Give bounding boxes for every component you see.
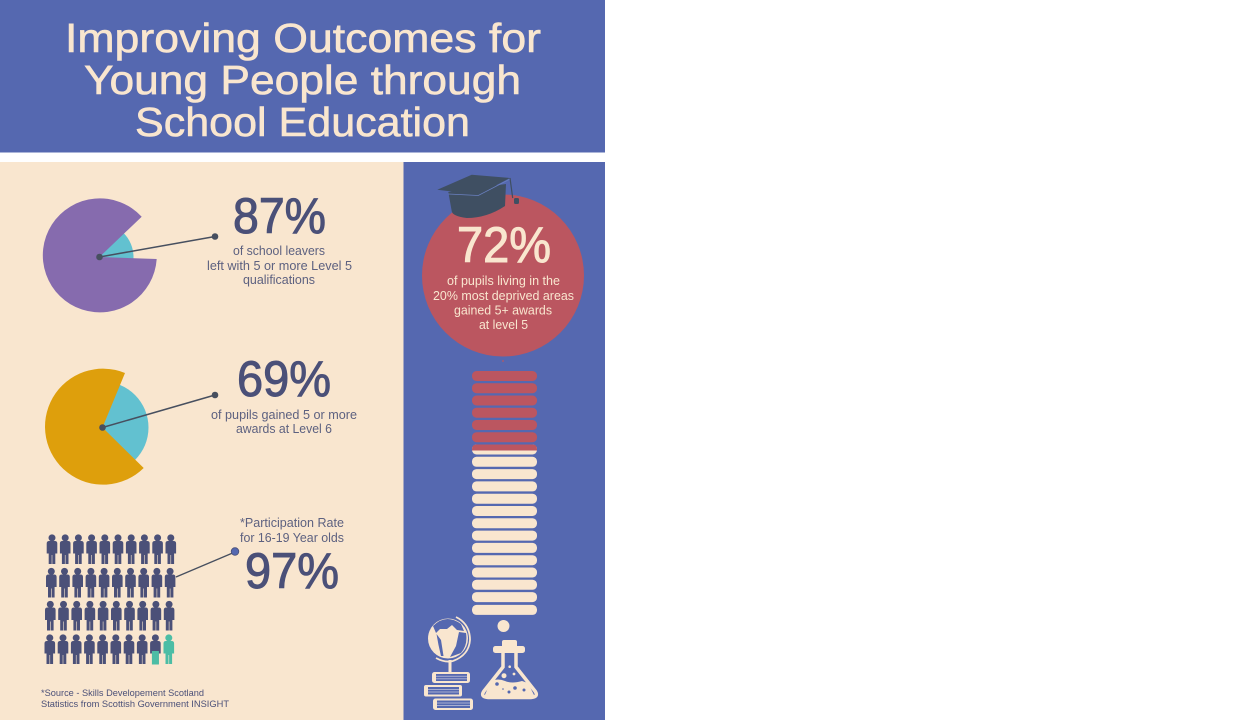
source note: *Source - Skills Developement Scotland bbox=[41, 688, 204, 699]
header banner bbox=[0, 0, 605, 152]
title bbox=[65, 15, 541, 145]
stat: 72%: 20% most deprived areas bbox=[433, 289, 574, 303]
pictogram: participation people bbox=[44, 534, 176, 664]
stat: 97%: 97% bbox=[245, 543, 339, 599]
stat: 87%: 87% bbox=[233, 188, 326, 244]
pie chart: 87% bbox=[43, 198, 218, 312]
pie chart: 69% bbox=[45, 369, 218, 485]
stat: 72%: of pupils living in the bbox=[447, 274, 560, 288]
stat: 72%: 72% bbox=[457, 217, 551, 273]
stat: 87%: left with 5 or more Level 5 bbox=[207, 259, 352, 273]
red circle stat bbox=[422, 194, 584, 356]
stat: 87%: qualifications bbox=[243, 273, 315, 287]
stat: 97% bbox=[240, 516, 344, 599]
progress column: stacked bars bbox=[472, 371, 537, 615]
connector: participation bbox=[176, 548, 239, 577]
title: School Education bbox=[135, 99, 470, 145]
stat: 97%: *Participation Rate bbox=[240, 516, 344, 530]
stat: 72% bbox=[433, 217, 574, 332]
icon: flask bbox=[483, 640, 536, 698]
icon: globe on books bbox=[424, 617, 473, 710]
books bbox=[424, 672, 473, 710]
icon: graduation cap bbox=[437, 175, 519, 218]
stat: 87%: of school leavers bbox=[233, 244, 325, 258]
icon: dot above flask bbox=[498, 620, 510, 632]
stat: 69%: awards at Level 6 bbox=[236, 422, 332, 436]
stat: 69%: 69% bbox=[237, 351, 331, 407]
panel: statistics bbox=[0, 162, 404, 720]
stat: 97%: for 16-19 Year olds bbox=[240, 531, 344, 545]
stat: 87% bbox=[207, 188, 352, 287]
source note: Statistics from Scottish Government INSIGHT bbox=[41, 699, 229, 710]
title: Improving Outcomes for bbox=[65, 15, 541, 61]
stat: 72%: gained 5+ awards bbox=[454, 304, 552, 318]
source note bbox=[41, 688, 229, 710]
stat: 69% bbox=[211, 351, 357, 436]
marker dot under circle bbox=[502, 360, 504, 362]
panel: deprived areas bbox=[404, 162, 605, 720]
stat: 69%: of pupils gained 5 or more bbox=[211, 408, 357, 422]
stat: 72%: at level 5 bbox=[479, 318, 528, 332]
title: Young People through bbox=[84, 57, 521, 103]
